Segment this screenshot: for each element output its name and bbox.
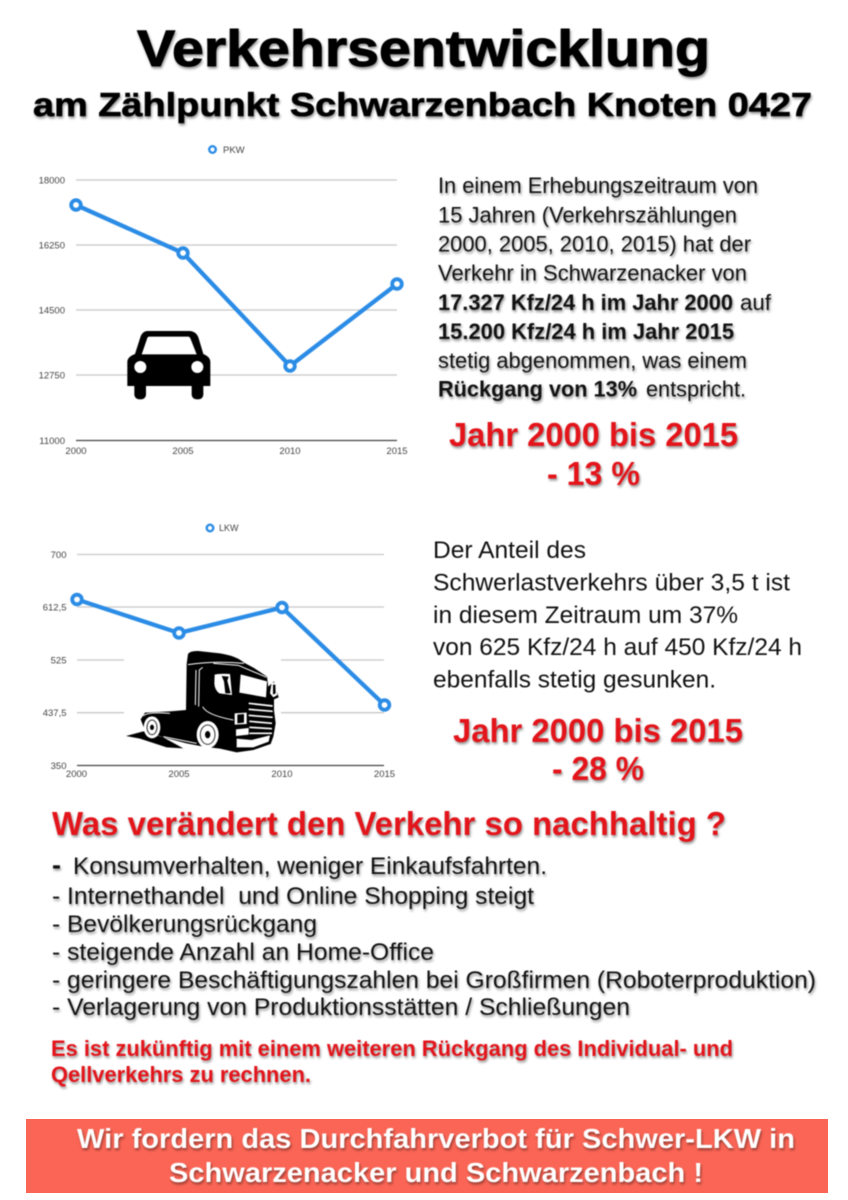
y axis labels: 612,5 — [43, 602, 66, 614]
text block: LKW explanation: von 625 Kfz/24 h auf 450 Kfz/24 h — [433, 634, 802, 661]
sub heading: am Zählpunkt Schwarzenbach Knoten 0427 — [33, 86, 812, 123]
list: reasons: - Bevölkerungsrückgang — [52, 911, 317, 938]
callout: LKW minus 28 percent: - 28 % — [552, 750, 644, 787]
text block: LKW explanation — [433, 537, 802, 694]
y axis labels — [43, 550, 66, 772]
heading: question: Was verändert den Verkehr so nachhaltig ? — [52, 805, 726, 842]
text block: outlook — [51, 1036, 733, 1087]
line chart: PKW — [39, 145, 408, 457]
data line — [71, 200, 402, 371]
text block: outlook: Qellverkehrs zu rechnen. — [51, 1062, 311, 1087]
line chart: LKW — [43, 523, 395, 780]
banner text — [77, 1123, 795, 1188]
list: reasons: - Verlagerung von Produktionsstätten / Schließungen — [52, 994, 630, 1021]
y axis labels: 11000 — [39, 436, 65, 447]
text block: LKW explanation: Schwerlastverkehrs über 3,5 t ist — [433, 570, 790, 597]
y axis labels — [39, 176, 65, 447]
icon: truck — [126, 651, 279, 752]
title — [33, 20, 812, 123]
callout: PKW minus 13 percent — [449, 416, 738, 492]
list: reasons: - geringere Beschäftigungszahlen bei Großfirmen (Roboterproduktion) — [52, 967, 816, 994]
text block: PKW explanation: 15.200 Kfz/24 h im Jahr 2015 — [438, 319, 734, 344]
list: reasons: Konsumverhalten, weniger Einkaufsfahrten. — [73, 853, 547, 880]
y axis labels: 700 — [51, 550, 66, 561]
legend: LKW — [207, 523, 239, 533]
text block: PKW explanation — [438, 173, 772, 402]
x axis labels — [65, 446, 408, 457]
y axis labels: 18000 — [39, 176, 65, 186]
legend: PKW — [209, 145, 245, 156]
y axis labels: 437,5 — [43, 708, 66, 719]
text block: outlook: Es ist zukünftig mit einem weiteren Rückgang des Individual- und — [51, 1036, 733, 1061]
text block: LKW explanation: ebenfalls stetig gesunken. — [433, 667, 716, 694]
x axis labels: 2010 — [271, 769, 293, 780]
y axis labels: 14500 — [39, 306, 65, 316]
icon: car — [127, 331, 210, 399]
text block: LKW explanation: in diesem Zeitraum um 37% — [433, 602, 738, 629]
text block: PKW explanation: 2000, 2005, 2010, 2015) hat der — [438, 232, 751, 257]
text block: PKW explanation: 15 Jahren (Verkehrszählungen — [438, 203, 737, 228]
callout: PKW minus 13 percent: - 13 % — [547, 455, 640, 492]
text block: PKW explanation: Verkehr in Schwarzenacker von — [438, 261, 747, 286]
text block: PKW explanation: Rückgang von 13% — [438, 377, 637, 402]
legend: LKW: LKW — [219, 523, 239, 533]
text block: PKW explanation: entspricht. — [646, 377, 746, 402]
x axis labels: 2015 — [374, 769, 395, 780]
y axis labels: 16250 — [39, 240, 65, 252]
text block: PKW explanation: auf — [740, 290, 772, 315]
list: reasons: - — [52, 850, 61, 880]
y axis labels: 350 — [51, 761, 66, 772]
list: reasons — [52, 850, 816, 1021]
banner text: Wir fordern das Durchfahrverbot für Schwer-LKW in — [77, 1123, 795, 1154]
x axis labels: 2010 — [279, 446, 301, 457]
text block: PKW explanation: stetig abgenommen, was einem — [438, 348, 747, 373]
callout: LKW minus 28 percent — [453, 712, 743, 787]
data line — [72, 595, 389, 710]
x axis labels: 2005 — [168, 769, 190, 780]
x axis labels: 2000 — [66, 769, 87, 780]
x axis labels: 2005 — [172, 446, 194, 457]
text block: LKW explanation: Der Anteil des — [433, 537, 586, 564]
main heading: Verkehrsentwicklung — [137, 20, 710, 77]
y axis labels: 525 — [51, 656, 66, 666]
text block: PKW explanation: In einem Erhebungszeitraum von — [438, 173, 758, 198]
x axis labels: 2000 — [65, 446, 87, 457]
banner: demand — [26, 1119, 828, 1193]
text block: PKW explanation: 17.327 Kfz/24 h im Jahr 2000 — [438, 290, 733, 315]
x axis labels — [66, 769, 395, 780]
list: reasons: - steigende Anzahl an Home-Office — [52, 939, 434, 966]
list: reasons: - Internethandel und Online Shopping steigt — [52, 883, 534, 910]
callout: PKW minus 13 percent: Jahr 2000 bis 2015 — [449, 416, 738, 453]
callout: LKW minus 28 percent: Jahr 2000 bis 2015 — [453, 712, 743, 749]
y axis labels: 12750 — [39, 370, 65, 382]
legend: PKW: PKW — [223, 145, 245, 156]
x axis labels: 2015 — [386, 446, 408, 457]
banner text: Schwarzenacker und Schwarzenbach ! — [169, 1157, 703, 1188]
